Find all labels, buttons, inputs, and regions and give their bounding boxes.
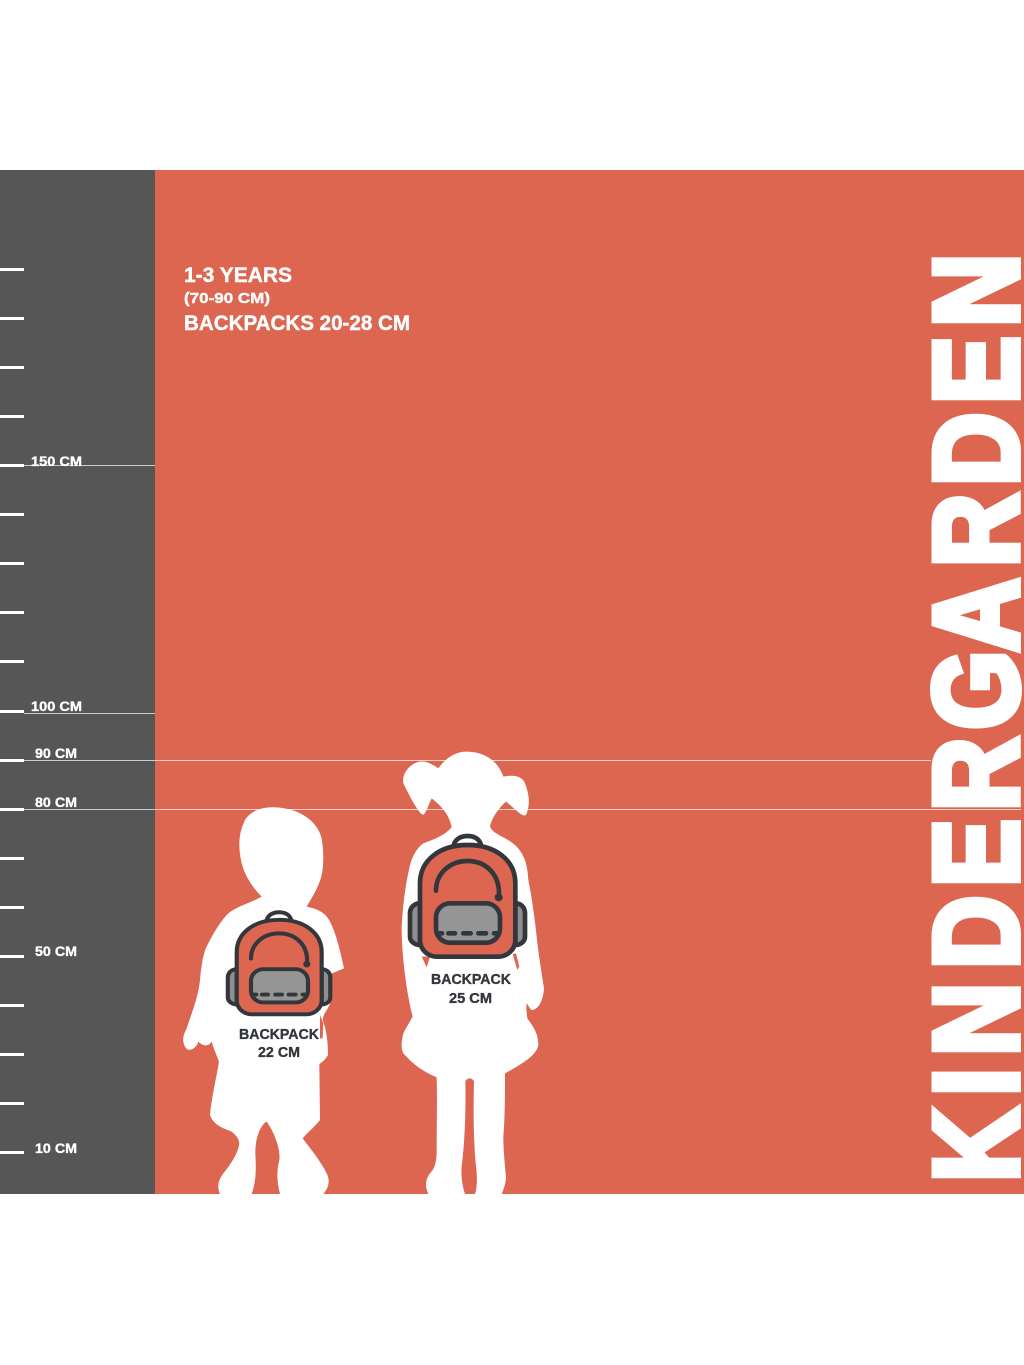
panel: main red background bbox=[155, 170, 1024, 1194]
figure: girl silhouette bbox=[402, 752, 544, 1194]
heading: age and backpack range: (70-90 CM) bbox=[184, 290, 270, 307]
ruler labels: 80 CM bbox=[35, 794, 77, 810]
label: boy backpack size: BACKPACK bbox=[239, 1026, 319, 1043]
heading: age and backpack range bbox=[184, 264, 410, 335]
ruler labels: 90 CM bbox=[35, 745, 77, 761]
ruler tick marks bbox=[0, 268, 24, 1154]
ruler labels: 150 CM bbox=[31, 453, 82, 469]
ruler labels: 50 CM bbox=[35, 943, 77, 959]
label: girl backpack size: BACKPACK bbox=[431, 971, 511, 988]
label: boy backpack size: 22 CM bbox=[258, 1044, 300, 1061]
figure: boy silhouette bbox=[183, 807, 344, 1194]
ruler labels: 10 CM bbox=[35, 1140, 77, 1156]
label: girl backpack size: 25 CM bbox=[449, 990, 492, 1007]
icon: girl backpack bbox=[410, 836, 525, 957]
label: girl backpack size bbox=[431, 971, 511, 1007]
heading: age and backpack range: 1-3 YEARS bbox=[184, 264, 292, 287]
panel: height ruler sidebar bbox=[0, 170, 155, 1194]
ruler labels bbox=[31, 453, 82, 1156]
ruler labels: 100 CM bbox=[31, 698, 82, 714]
heading: age and backpack range: BACKPACKS 20-28 CM bbox=[184, 312, 410, 335]
icon: boy backpack bbox=[228, 912, 330, 1014]
label: boy backpack size bbox=[239, 1026, 319, 1061]
